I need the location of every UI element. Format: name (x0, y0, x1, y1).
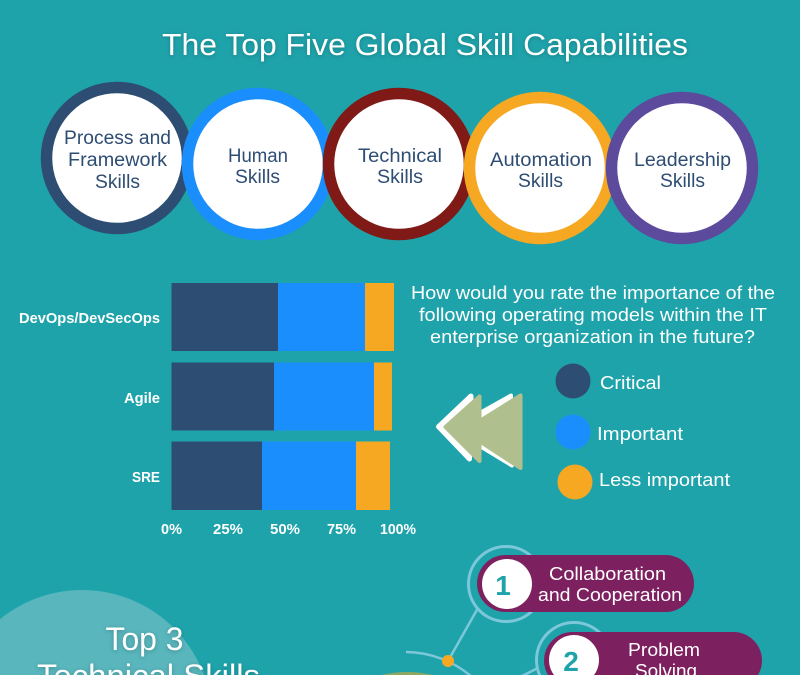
chart axis labels: 100% (380, 521, 416, 538)
legend item: less important (558, 464, 730, 500)
panel: top 3 technical skills heading: Top 3 (106, 621, 184, 657)
circle: automation skills (470, 98, 610, 238)
survey question text: following operating models within the IT (419, 305, 767, 325)
title: The Top Five Global Skill Capabilities (162, 27, 688, 62)
circle: leadership skills (612, 98, 752, 238)
survey question text: enterprise organization in the future? (430, 327, 755, 347)
circle: human skills (188, 94, 328, 234)
chart axis labels (161, 521, 416, 538)
skill 1: collaboration and cooperation (468, 546, 694, 622)
chart axis labels: 50% (270, 521, 300, 538)
skill 2: problem solving (536, 622, 762, 675)
circle: automation skills: Automation (490, 150, 592, 171)
legend item: important (556, 414, 683, 450)
circle: technical skills: Technical (358, 146, 442, 167)
bar: DevOps/DevSecOps (19, 283, 394, 351)
bar: SRE (132, 442, 390, 510)
survey question text: How would you rate the importance of the (411, 283, 775, 303)
circle: automation skills: Skills (518, 171, 563, 192)
skill 1: collaboration and cooperation: Collaboration (549, 564, 666, 584)
chart axis labels: 75% (327, 521, 356, 538)
legend item: critical: Critical (600, 373, 661, 393)
bar: SRE: SRE (132, 469, 160, 486)
chart axis labels: 25% (213, 521, 243, 538)
circle: technical skills (328, 94, 470, 234)
bar: DevOps/DevSecOps: DevOps/DevSecOps (19, 310, 160, 327)
circle: human skills: Human (228, 146, 288, 167)
chart axis labels: 0% (161, 521, 182, 538)
legend item: less important: Less important (599, 470, 730, 490)
skill 1: collaboration and cooperation: 1 (495, 570, 511, 601)
skill 1: collaboration and cooperation: and Cooperation (538, 585, 682, 605)
skill 2: problem solving: Problem (628, 640, 700, 660)
circle: human skills: Skills (235, 167, 280, 188)
diagram: connectors and central node (297, 608, 538, 675)
circle: process and framework skills: Process and (64, 128, 171, 149)
survey question text (411, 283, 775, 347)
bar: Agile: Agile (124, 390, 160, 407)
icon: double left arrow (438, 396, 520, 468)
legend item: important: Important (597, 424, 683, 444)
circle: process and framework skills (46, 88, 188, 228)
stacked bar chart (19, 283, 416, 538)
circle: leadership skills: Skills (660, 171, 705, 192)
circle: technical skills: Skills (377, 167, 423, 188)
circle: leadership skills: Leadership (634, 150, 731, 171)
legend (556, 364, 730, 500)
panel: top 3 technical skills heading (0, 590, 260, 675)
circle: process and framework skills: Skills (95, 172, 140, 193)
panel: five skill circles (46, 88, 752, 238)
circle: process and framework skills: Framework (68, 150, 168, 171)
legend item: critical (556, 364, 661, 398)
bar: Agile (124, 362, 392, 430)
